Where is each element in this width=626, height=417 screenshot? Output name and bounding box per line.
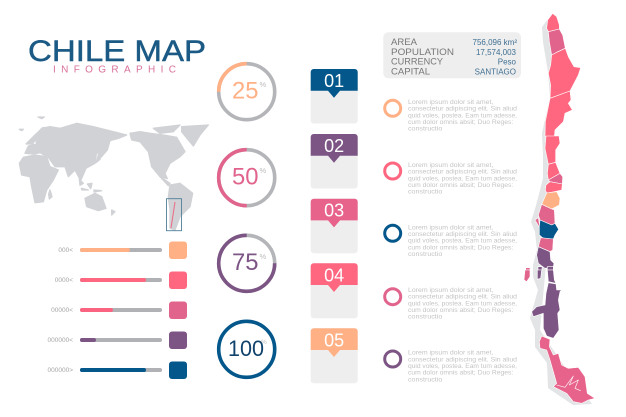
gauge 100 percent: %: [261, 339, 267, 346]
gauge 100 percent: [219, 321, 275, 377]
text block 1: cum dolor omnis absit; Duo Reges:: [408, 119, 514, 126]
legend row 2: 0000<: [55, 277, 73, 284]
country facts panel: [383, 32, 521, 78]
legend row 3: 00000<: [51, 307, 73, 314]
gauge 75 percent: [219, 235, 275, 291]
text block 3: constructio: [408, 251, 443, 258]
text block 3: Lorem ipsum dolor sit amet,: [408, 224, 494, 231]
card 01: [311, 69, 358, 124]
card 02: 02: [324, 136, 344, 156]
text block 2: consectetur adipiscing elit. Sin aliud: [408, 169, 518, 176]
text block 2: Lorem ipsum dolor sit amet,: [408, 162, 494, 169]
country facts panel: 17,574,003: [476, 48, 517, 57]
southern regions: [524, 270, 595, 403]
text block 5: [385, 350, 518, 383]
gauge 25 percent: 25: [232, 78, 258, 104]
country facts panel: POPULATION: [391, 47, 454, 58]
card 03: 03: [324, 201, 344, 221]
text block 2: cum dolor omnis absit; Duo Reges:: [408, 182, 514, 189]
text block 3: cum dolor omnis absit; Duo Reges:: [408, 244, 514, 251]
gauge 25 percent: [219, 64, 275, 120]
text block 3: quid voles, postea. Eam tum adesse,: [408, 238, 517, 245]
gauge 75 percent: %: [260, 252, 266, 261]
text block 5: constructio: [408, 376, 443, 383]
card 04: 04: [324, 265, 344, 285]
card 05: 05: [324, 330, 344, 350]
gauge 50 percent: [219, 150, 275, 206]
text block 3: [385, 224, 518, 258]
text block 5: cum dolor omnis absit; Duo Reges:: [408, 370, 514, 377]
text block 1: Lorem ipsum dolor sit amet,: [408, 99, 494, 106]
text block 5: quid voles, postea. Eam tum adesse,: [408, 363, 517, 370]
world map: [19, 117, 208, 230]
northern regions: [545, 13, 581, 137]
country facts panel: 756,096 km²: [473, 38, 517, 47]
text block 1: constructio: [408, 126, 443, 133]
text block 1: consectetur adipiscing elit. Sin aliud: [408, 106, 518, 113]
chile regional map: [524, 13, 595, 405]
country facts panel: AREA: [391, 37, 418, 48]
legend row 1: 000<: [58, 247, 73, 254]
country facts panel: SANTIAGO: [475, 67, 516, 76]
title: INFOGRAPHIC: [53, 64, 176, 75]
text block 4: constructio: [408, 314, 443, 321]
text block 4: cum dolor omnis absit; Duo Reges:: [408, 307, 514, 314]
text block 1: quid voles, postea. Eam tum adesse,: [408, 112, 517, 119]
gauge 50 percent: %: [260, 166, 266, 175]
text block 4: Lorem ipsum dolor sit amet,: [408, 287, 494, 294]
gauge 25 percent: %: [260, 80, 266, 89]
text block 2: constructio: [408, 189, 443, 196]
central regions: [526, 136, 563, 270]
legend row 4: 000000<: [48, 337, 73, 344]
legend row 5: 000000>: [48, 367, 73, 374]
title: CHILE MAP: [28, 35, 206, 68]
text block 3: consectetur adipiscing elit. Sin aliud: [408, 231, 518, 238]
gauge 75 percent: 75: [232, 249, 258, 276]
gauge 50 percent: 50: [232, 164, 258, 190]
text block 5: Lorem ipsum dolor sit amet,: [408, 350, 494, 357]
card 03: [311, 199, 358, 253]
text block 4: [385, 287, 518, 321]
text block 4: consectetur adipiscing elit. Sin aliud: [408, 294, 518, 301]
text block 5: consectetur adipiscing elit. Sin aliud: [408, 356, 518, 363]
chile locator box: [166, 199, 182, 231]
gauge 100 percent: 100: [228, 336, 264, 361]
card 04: [311, 263, 358, 318]
map shadow: [530, 19, 592, 405]
bar legend: [48, 242, 187, 379]
card 05: [311, 328, 358, 383]
card 01: 01: [324, 71, 344, 91]
text block 2: [385, 162, 518, 196]
text block 1: [385, 99, 518, 133]
country facts panel: CAPITAL: [391, 66, 430, 77]
country facts panel: Peso: [498, 58, 517, 67]
country facts panel: CURRENCY: [391, 57, 444, 68]
text block 4: quid voles, postea. Eam tum adesse,: [408, 300, 517, 307]
card 02: [311, 134, 358, 188]
text block 2: quid voles, postea. Eam tum adesse,: [408, 175, 517, 182]
